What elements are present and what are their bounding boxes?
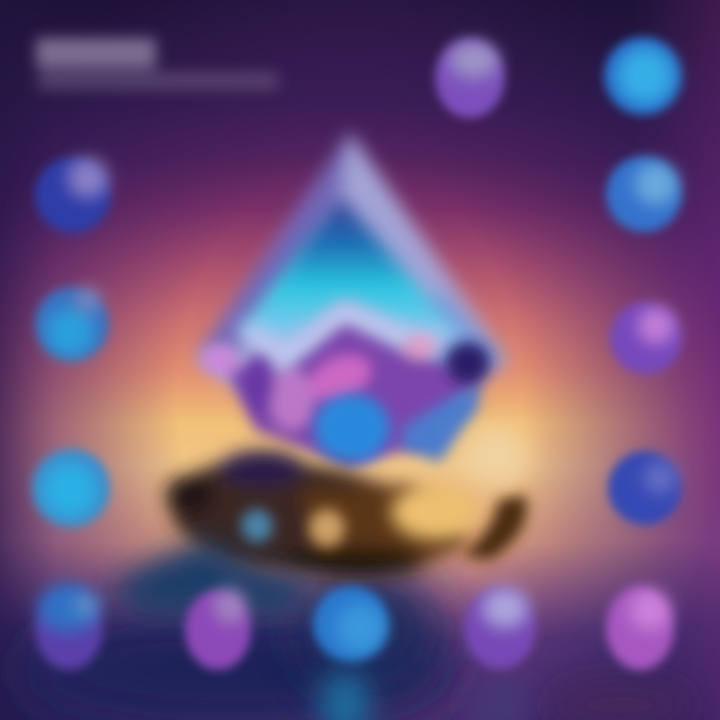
subtitle: [38, 72, 278, 90]
dark facet: [446, 342, 490, 384]
icon: top center orb: [435, 38, 505, 118]
icon: left orb 1: [35, 157, 111, 233]
heading: [36, 38, 156, 68]
nest blue glow: [241, 509, 273, 543]
dark nest: [166, 450, 470, 576]
diamond outer rim: [197, 132, 508, 468]
icon: bottom orb 2: [185, 588, 251, 670]
nest base: [110, 427, 527, 615]
nest tan glow: [309, 509, 345, 547]
icon: bottom orb 3: [313, 586, 389, 662]
blue crystal: [314, 380, 480, 462]
cream glow: [463, 427, 527, 483]
light zigzag band: [245, 312, 445, 358]
icon: top right orb: [604, 37, 682, 115]
icon: left orb 3: [32, 449, 110, 527]
dark blue water: [110, 540, 320, 615]
icon: bottom orb 1: [35, 584, 103, 670]
icon: right orb 1: [606, 156, 682, 232]
nest right crescent: [462, 495, 527, 560]
icon: right orb 3: [608, 451, 682, 525]
central diamond illustration: [197, 132, 508, 468]
icon: bottom orb 4: [464, 587, 536, 669]
diamond inner upper facet: [236, 195, 468, 345]
title block: [36, 38, 278, 90]
icon: left orb 2: [35, 287, 109, 361]
icon: bottom orb 5: [606, 586, 674, 670]
icon: right orb 2: [610, 302, 682, 374]
diamond lower facets: [202, 325, 480, 465]
nest yellow glow: [391, 484, 479, 540]
